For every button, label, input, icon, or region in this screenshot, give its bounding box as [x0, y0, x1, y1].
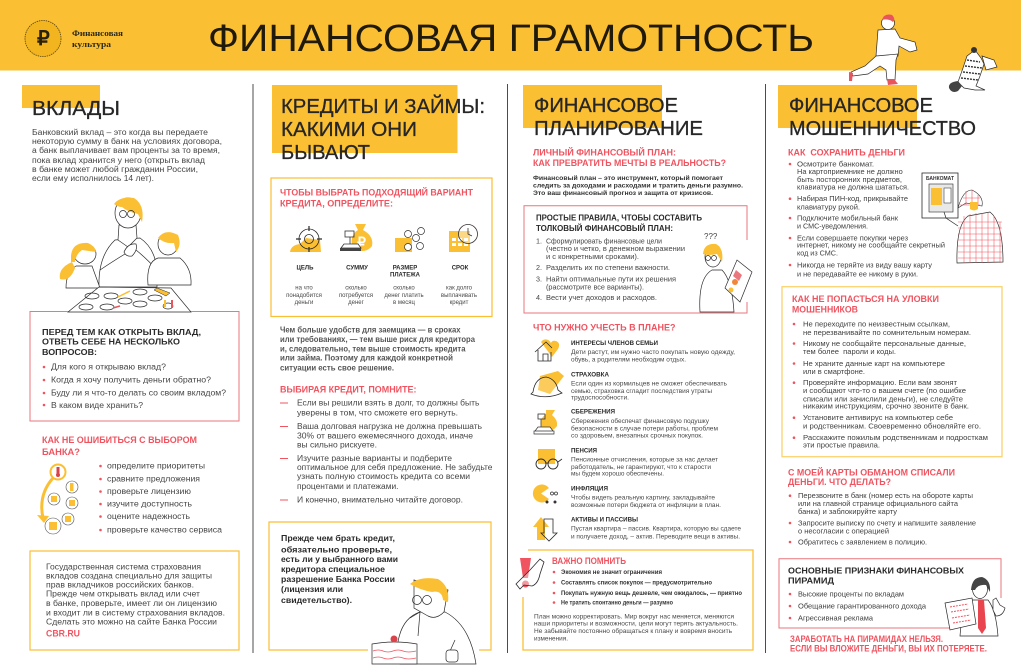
credit option labels: сколько [393, 286, 415, 292]
credit option labels: денег [348, 300, 365, 306]
header band [0, 0, 1021, 70]
logo: Финансовая [72, 29, 124, 38]
box: fraud traps [782, 287, 1002, 457]
title: ФИНАНСОВАЯ ГРАМОТНОСТЬ [208, 18, 814, 60]
box: simple rules: и с конкретными сроками). [546, 252, 639, 261]
box: deposit insurance [30, 551, 239, 650]
list: how to keep money safe: и СМС-уведомления. [797, 222, 868, 230]
box: simple rules: 4. [536, 293, 542, 302]
heading: choosing a bank: КАК НЕ ОШИБИТЬСЯ С ВЫБОРОМ [42, 435, 197, 445]
item: pension [536, 448, 718, 478]
illustration: man with a tie and a leaflet [945, 577, 1005, 636]
heading: planning [523, 85, 703, 140]
box: simple rules: Разделить их по степени важности. [546, 263, 670, 272]
list: how to keep money safe: клавиатура не должна шататься. [797, 182, 909, 192]
heading: planning: ПЛАНИРОВАНИЕ [534, 118, 703, 140]
box: check the license: есть ли у выбранного вами [281, 554, 398, 564]
list: credit reminders: Изучите разные варианты и подберите [297, 454, 452, 463]
subheading: personal plan: КАК ПРЕВРАТИТЬ МЕЧТЫ В РЕАЛЬНОСТЬ? [533, 158, 726, 168]
box: fraud traps: МОШЕННИКОВ [792, 304, 858, 314]
item: inflation: Чтобы видеть реальную картину, закладывайте [571, 494, 715, 502]
box: questions before opening a deposit: ПЕРЕД ТЕМ КАК ОТКРЫТЬ ВКЛАД, [42, 327, 201, 337]
box: pyramid signs: Агрессивная реклама [798, 614, 874, 622]
panel: deposits [22, 85, 239, 650]
logo: культура [72, 40, 111, 49]
box: remember: Экономия не значит ограничения [561, 569, 662, 576]
warning: pyramids lose money [790, 634, 987, 654]
item: inflation: возможные потери бюджета от инфляции в план. [571, 501, 721, 509]
list: money stolen, what to do: Запросите выписку по счету и напишите заявление [798, 518, 976, 528]
heading: credits: КАКИМИ ОНИ [281, 119, 417, 141]
box: questions before opening a deposit: Когда я хочу получить деньги обратно? [51, 376, 212, 384]
text: risk paragraph: или займа. Поэтому для каждой конкретной [280, 354, 453, 362]
box: deposit insurance: Сделать это можно на сайте Банка России [46, 618, 217, 626]
icon: payment size [395, 228, 424, 252]
box: deposit insurance: CBR.RU [46, 628, 80, 638]
credit option labels [286, 266, 477, 306]
item: pension: Пенсионные отчисления, которые за нас делает [571, 456, 718, 464]
subheading: personal plan: ЛИЧНЫЙ ФИНАНСОВЫЙ ПЛАН: [533, 146, 676, 158]
list: credit reminders: ВЫБИРАЯ КРЕДИТ, ПОМНИТЕ: [280, 384, 416, 394]
box: fraud traps: Проверяйте информацию. Если вам звонят [803, 378, 958, 387]
credit option labels: как долго [446, 286, 473, 292]
box: questions before opening a deposit: Буду ли я что-то делать со своим вкладом? [51, 388, 227, 398]
icon: steps timeline [37, 464, 78, 534]
box: fraud traps: Расскажите пожилым родственникам и подросткам [803, 433, 988, 442]
item: family interests: ИНТЕРЕСЫ ЧЛЕНОВ СЕМЬИ [571, 340, 658, 347]
list: credit reminders: оптимальное для себя предложение. Не забудьте [297, 463, 492, 472]
item: insurance: семью, страховка сгладит последствия утраты [571, 388, 712, 395]
item: insurance: трудоспособности. [571, 394, 629, 402]
text: risk paragraph [280, 326, 476, 372]
box: simple rules: (рассмотрите все варианты). [546, 282, 644, 292]
box: fraud traps: или в смартфоне. [803, 367, 865, 376]
item: savings: безопасности в случае потери работы, проблем [571, 424, 718, 432]
warning: pyramids lose money: ЕСЛИ ВЫ ВЛОЖИТЕ ДЕНЬГИ, ВЫ ИХ ПОТЕРЯЕТЕ. [790, 644, 987, 654]
box: remember: Составлять список покупок — предусмотрительно [561, 580, 712, 587]
list: credit reminders [280, 384, 492, 504]
text: risk paragraph: ситуации есть свое решение. [280, 364, 394, 372]
item: assets and liabilities: и получаете доход, – актив. Переводите вещи в активы. [571, 534, 740, 540]
credit option labels: СУММУ [346, 266, 368, 272]
box: pyramid signs [779, 559, 1005, 636]
credit option labels: СРОК [452, 266, 469, 272]
credit option labels: кредит [450, 300, 469, 306]
box: fraud traps: Не переходите по неизвестным ссылкам, [803, 320, 950, 328]
heading: fraud [778, 85, 976, 140]
list: money stolen, what to do: Перезвоните в банк (номер есть на обороте карты [798, 491, 973, 500]
subheading: personal plan [533, 146, 726, 168]
credit option labels: ПЛАТЕЖА [390, 272, 421, 278]
list: credit reminders: процентами и платежами. [297, 482, 398, 491]
list: money stolen, what to do: ДЕНЬГИ. ЧТО ДЕЛАТЬ? [788, 477, 891, 487]
item: inflation: ИНФЛЯЦИЯ [571, 486, 608, 492]
box: remember: ВАЖНО ПОМНИТЬ [552, 556, 626, 566]
icon: helmet and bricks [531, 371, 564, 397]
intro text: некоторую сумму в банк на условиях договора, [32, 137, 222, 146]
box: remember: изменения. [534, 635, 568, 642]
box: fraud traps: и родственникам. Своевременно обновляйте его. [803, 422, 981, 430]
box: check the license: кредитора специальное [281, 564, 385, 574]
list: bank checks [99, 462, 223, 534]
text: plan definition: Это ваш финансовый прогноз и защита от кризисов. [533, 189, 713, 197]
credit option labels: деньги [295, 300, 313, 306]
column dividers [253, 84, 766, 653]
box: simple rules: ПРОСТЫЕ ПРАВИЛА, ЧТОБЫ СОСТАВИТЬ [536, 212, 702, 222]
box: fraud traps: не перезванивайте по сомнительным номерам. [803, 328, 971, 337]
box: simple rules: 2. [536, 263, 542, 272]
box: fraud traps: списали или зачислили деньги), не следуйте [803, 394, 963, 404]
box: deposit insurance: вкладов создана специально для защиты [46, 572, 212, 580]
credit option labels: выплачивать [441, 293, 477, 299]
logo [25, 20, 124, 56]
text: plan definition: следить за доходами и расходами и тратить деньги разумно. [533, 182, 743, 190]
box: simple rules: 3. [536, 274, 542, 284]
illustration: confused man with a paper [700, 232, 752, 312]
item: pension: мы будем хорошо обеспечены. [571, 470, 664, 478]
item: assets and liabilities: Пустая квартира – пассив. Квартира, которую вы сдаете [571, 526, 741, 532]
box: simple rules: Найти оптимальные пути их решения [546, 274, 676, 284]
illustration: detective at an ATM [922, 173, 1003, 263]
text: risk paragraph: и, следовательно, тем выше стоимость кредита [280, 344, 466, 354]
box: questions before opening a deposit: Для кого я открываю вклад? [51, 362, 167, 372]
box: questions before opening a deposit: В каком виде хранить? [51, 401, 144, 410]
icon: pacman eating coins [533, 485, 558, 504]
item: family interests: обувь, а родителям необходим отдых. [571, 356, 686, 364]
heading: what to consider: ЧТО НУЖНО УЧЕСТЬ В ПЛАНЕ? [533, 322, 676, 332]
box: simple rules [524, 206, 752, 313]
box: deposit insurance: в банке, проверьте, имеет ли он лицензию [46, 599, 217, 608]
list: money stolen, what to do: Обратитесь с заявлением в полицию. [798, 538, 927, 546]
box: check the license: свидетельство). [281, 595, 352, 605]
list: bank checks: определите приоритеты [107, 462, 205, 470]
box: fraud traps: КАК НЕ ПОПАСТЬСЯ НА УЛОВКИ [792, 294, 939, 304]
intro text: в банке может любой гражданин России, [32, 165, 198, 174]
item: savings [534, 408, 718, 440]
credit option labels: понадобится [286, 293, 322, 299]
illustration: detective at an ATM: БАНКОМАТ [926, 176, 955, 182]
box: pyramid signs: ПИРАМИД [788, 576, 834, 586]
icon: glasses and wallet [536, 449, 562, 469]
box: questions before opening a deposit: ВОПРОСОВ: [42, 347, 97, 357]
list: how to keep money safe: Подключите мобильный банк [797, 214, 899, 222]
text: plan definition [533, 174, 743, 197]
box: fraud traps: Не храните данные карт на компьютере [803, 359, 945, 368]
intro text: Банковский вклад – это когда вы передаете [32, 128, 208, 137]
credit option labels: сколько [345, 286, 367, 292]
box: choosing a credit: ЧТОБЫ ВЫБРАТЬ ПОДХОДЯЩИЙ ВАРИАНТ [280, 186, 473, 198]
box: fraud traps: и сообщают что-то о вашем счете (по ошибке [803, 386, 966, 395]
illustration: raccoon [949, 47, 997, 92]
list: bank checks: изучите доступность [107, 500, 192, 508]
heading: planning: ФИНАНСОВОЕ [534, 95, 678, 117]
box: remember: Покупать нужную вещь дешевле, чем ожидалось, — приятно [561, 590, 742, 597]
list: how to keep money safe: быть посторонних предметов, [797, 175, 902, 184]
list: how to keep money safe: КАК СОХРАНИТЬ ДЕНЬГИ [788, 148, 905, 158]
panel: credits and loans [269, 85, 492, 664]
list: credit reminders: вы сильно рискуете. [297, 440, 377, 450]
box: questions before opening a deposit: ОТВЕТЬ СЕБЕ НА НЕСКОЛЬКО [42, 336, 180, 346]
box: check the license: обязательно проверьте, [281, 544, 392, 554]
heading: deposits [22, 85, 120, 120]
list: credit reminders: уверены в том, что сможете его вернуть. [297, 408, 458, 418]
box: fraud traps: тем более пароли и коды. [803, 347, 896, 356]
list: credit reminders: узнать полную стоимость кредита со всеми [297, 472, 470, 481]
item: pension: ПЕНСИЯ [571, 448, 597, 454]
heading: credits [272, 85, 485, 164]
panel: financial planning [516, 85, 753, 650]
box: check the license: разрешение Банка России [281, 574, 395, 584]
heading: fraud: МОШЕННИЧЕСТВО [789, 118, 976, 140]
icon: amount [340, 224, 372, 251]
box: choosing a credit: КРЕДИТА, ОПРЕДЕЛИТЕ: [280, 198, 393, 208]
credit option labels: в месяц [393, 300, 416, 306]
item: insurance: СТРАХОВКА [571, 372, 609, 378]
box: deposit insurance: Прежде чем открывать вклад или счет [46, 590, 200, 598]
box: remember: План можно корректировать. Мир вокруг нас меняется, меняются [534, 613, 734, 620]
box: choosing a credit [271, 178, 492, 316]
icon: pointing hand with exclamation mark [516, 558, 544, 589]
box: simple rules: Сформулировать финансовые цели [546, 236, 662, 246]
box: remember [516, 550, 753, 650]
heading: credits: КРЕДИТЫ И ЗАЙМЫ: [281, 94, 485, 118]
box: deposit insurance: прав вкладчиков российских банков. [46, 580, 194, 590]
list: how to keep money safe: и не передавайте ее никому в руки. [797, 270, 918, 278]
box: questions before opening a deposit [30, 312, 239, 421]
illustration: family at a table [60, 198, 191, 312]
box: check the license: Прежде чем брать кредит, [281, 533, 395, 543]
icon: scale and money bag [534, 410, 557, 434]
panel: financial fraud [778, 85, 1005, 654]
list: credit reminders: И конечно, внимательно читайте договор. [297, 496, 463, 504]
list: bank checks: оцените надежность [107, 512, 190, 521]
box: simple rules: ТОЛКОВЫЙ ФИНАНСОВЫЙ ПЛАН: [536, 222, 673, 233]
list: money stolen, what to do: или на главной странице официального сайта [798, 499, 959, 508]
illustration: running man [849, 15, 917, 85]
box: simple rules: Вести учет доходов и расходов. [546, 293, 657, 302]
intro text: если ему исполнилось 14 лет). [32, 174, 154, 183]
list: money stolen, what to do [788, 466, 976, 546]
list: how to keep money safe: Никогда не теряйте из виду вашу карту [797, 260, 932, 270]
item: insurance [531, 371, 727, 402]
list: how to keep money safe: интернет, никому не сообщайте секретный [797, 240, 945, 250]
credit option labels: на что [295, 286, 313, 292]
intro text [32, 128, 222, 183]
icon: goal [290, 226, 322, 252]
heading: choosing a bank: БАНКА? [42, 447, 80, 457]
text: plan definition: Финансовый план – это инструмент, который помогает [533, 174, 724, 182]
icon: house with heart [535, 339, 559, 361]
item: inflation [533, 485, 721, 509]
item: insurance: Если один из кормильцев не сможет обеспечивать [571, 380, 727, 388]
box: pyramid signs: Обещание гарантированного дохода [798, 602, 927, 610]
illustration: confused man with a paper: ??? [704, 232, 718, 241]
box: fraud traps: никаким инструкциям, срочно звоните в банк. [803, 402, 969, 410]
list: credit reminders: Ваша долговая нагрузка не должна превышать [297, 422, 482, 431]
item: family interests: Дети растут, им нужно часто покупать новую одежду, [571, 349, 735, 356]
heading: choosing a bank [42, 435, 197, 457]
credit option labels: РАЗМЕР [393, 266, 417, 272]
box: remember: Не тратить спонтанно деньги — разумно [561, 600, 673, 607]
heading: credits: БЫВАЮТ [281, 142, 370, 164]
list: bank checks: сравните предложения [107, 474, 200, 484]
list: how to keep money safe: Набирая ПИН-код, прикрывайте [797, 194, 908, 203]
box: fraud traps: эти простые правила. [803, 440, 880, 450]
box: remember: наши приоритеты и возможности, цели могут терять актуальность. [534, 621, 738, 628]
list: how to keep money safe: код из СМС. [797, 248, 838, 258]
list: how to keep money safe: На картоприемнике не должно [797, 167, 903, 176]
item: pension: работодатель, не гарантируют, что к старости [571, 463, 711, 471]
item: savings: со здоровьем, внезапных срочных покупок. [571, 432, 703, 440]
box: fraud traps: Никому не сообщайте персональные данные, [803, 339, 966, 348]
list: bank checks: проверьте качество сервиса [107, 526, 223, 534]
box: fraud traps: Установите антивирус на компьютер себе [803, 413, 953, 422]
list: how to keep money safe: Осмотрите банкомат. [797, 160, 874, 168]
box: deposit insurance: и входит ли в систему страхования вкладов. [46, 608, 225, 618]
box: simple rules: (честно и четко, в денежном выражении [546, 244, 685, 253]
item: assets and liabilities [533, 516, 741, 541]
box: check the license: (лицензия или [281, 584, 343, 594]
item: savings: Сбережения обеспечат финансовую подушку [571, 417, 710, 425]
warning: pyramids lose money: ЗАРАБОТАТЬ НА ПИРАМИДАХ НЕЛЬЗЯ. [790, 634, 943, 644]
icon: up and down arrows [533, 517, 557, 541]
list: money stolen, what to do: С МОЕЙ КАРТЫ ОБМАНОМ СПИСАЛИ [788, 466, 955, 478]
credit option labels: ЦЕЛЬ [297, 266, 314, 272]
credit option labels: потребуется [339, 293, 373, 299]
item: family interests [535, 339, 735, 364]
icon: term [449, 224, 478, 252]
list: money stolen, what to do: банка) и заблокируйте карту [798, 507, 897, 516]
list: how to keep money safe [788, 148, 945, 278]
intro text: а банк выплачивает вам проценты за то время, [32, 146, 220, 155]
intro text: пока вклад хранится у него (открыть вклад [32, 156, 205, 165]
box: simple rules: 1. [536, 236, 542, 246]
list: money stolen, what to do: о несогласии с операцией [798, 526, 889, 536]
list: how to keep money safe: клавиатуру рукой. [797, 202, 860, 212]
box: deposit insurance: Государственная система страхования [46, 562, 201, 572]
box: remember: Не забывайте постоянно обращаться к плану и вовремя вносить [534, 627, 732, 635]
item: assets and liabilities: АКТИВЫ И ПАССИВЫ [571, 516, 639, 524]
illustration: man with cake [372, 578, 476, 664]
box: check the license [269, 522, 491, 664]
heading: fraud: ФИНАНСОВОЕ [789, 95, 933, 117]
credit option labels: денег платить [384, 293, 424, 299]
text: risk paragraph: или требованиях, — тем выше риск для кредитора [280, 335, 476, 344]
text: risk paragraph: Чем больше удобств для заемщика — в сроках [280, 326, 461, 334]
heading: deposits: ВКЛАДЫ [32, 98, 120, 120]
item: savings: СБЕРЕЖЕНИЯ [571, 408, 615, 416]
logo: ₽ [37, 28, 50, 50]
list: credit reminders: Если вы решили взять в долг, то должны быть [297, 398, 479, 408]
list: how to keep money safe: Если совершаете покупки через [797, 234, 909, 242]
list: credit reminders: 30% от вашего ежемесячного дохода, иначе [297, 432, 473, 440]
list: bank checks: проверьте лицензию [107, 487, 191, 496]
box: pyramid signs: Высокие проценты по вкладам [798, 590, 904, 598]
box: pyramid signs: ОСНОВНЫЕ ПРИЗНАКИ ФИНАНСОВЫХ [788, 566, 964, 576]
icon: amount: ₽ [357, 234, 366, 250]
